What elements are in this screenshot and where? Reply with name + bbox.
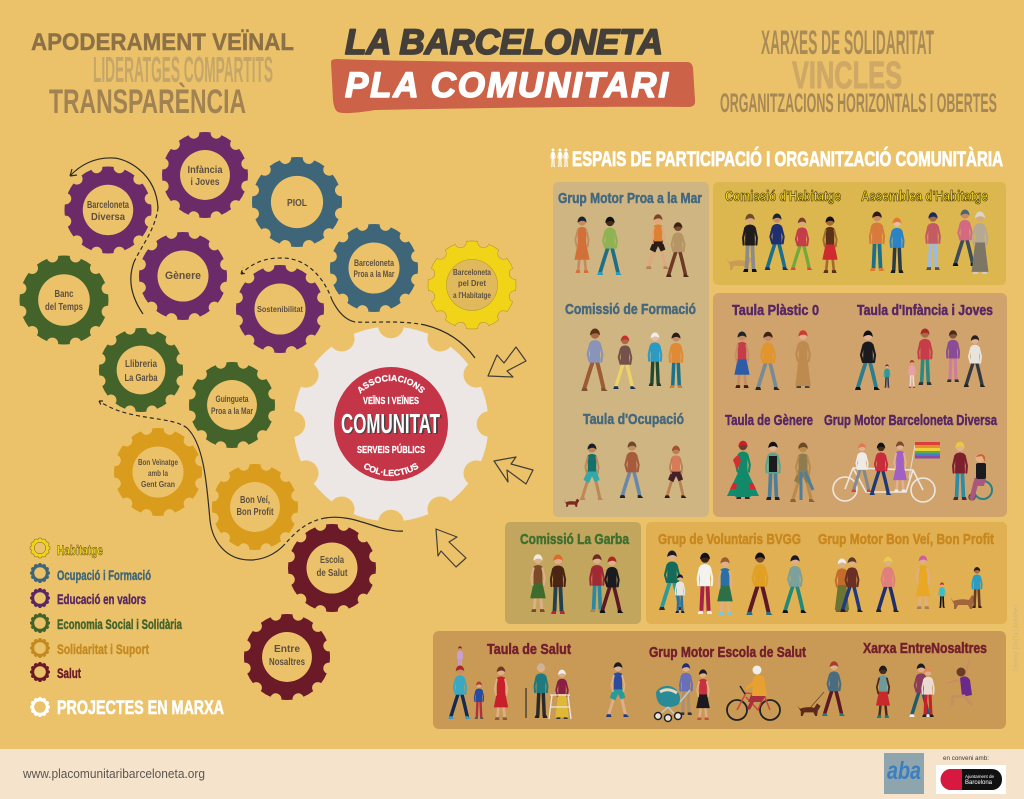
legend: Habitatge xyxy=(30,538,103,558)
heading: Taula d'Infància i Joves: Taula d'Infància i Joves xyxy=(857,302,993,319)
gear: Banc del Temps: Banc xyxy=(54,289,74,300)
panel: Habitatge xyxy=(713,182,1006,285)
heading: Comissió de Formació: Comissió de Formació xyxy=(565,301,696,318)
big gear: comunitat xyxy=(294,327,488,521)
gear: Barceloneta Diversa: Diversa xyxy=(91,212,125,223)
heading: Grup de Voluntaris BVGG: Grup de Voluntaris BVGG xyxy=(658,531,801,548)
people: Habitatge xyxy=(726,209,988,274)
gear: Entre Nosaltres: Nosaltres xyxy=(269,657,305,668)
text: LIDERATGES COMPARTITS xyxy=(93,49,273,90)
center labels: SERVEIS PÚBLICS xyxy=(357,443,425,456)
pram xyxy=(654,686,690,722)
panel: Educació en valors xyxy=(713,293,1007,517)
gear: Bon Veïnatge amb la Gent Gran xyxy=(114,428,202,516)
gear: Llibreria La Garba: La Garba xyxy=(124,373,158,384)
legend: Solidaritat i Suport: Solidaritat i Suport xyxy=(57,641,149,657)
gear: PIOL: PIOL xyxy=(287,198,307,209)
people: Taula de Salut xyxy=(448,646,571,720)
word cloud left xyxy=(31,29,294,121)
panel: Proa a la Mar, Formació, Ocupació xyxy=(553,182,709,517)
word cloud left: APODERAMENT VEÏNAL xyxy=(31,29,294,56)
people: Comissió de Formació xyxy=(581,329,683,391)
legend: Economia Social i Solidària xyxy=(30,613,182,633)
gear: Gènere xyxy=(139,232,227,320)
people: Grup Motor Proa a la Mar xyxy=(574,214,689,277)
legend: Salut xyxy=(30,662,81,682)
gear: Guingueta Proa a la Mar: Guingueta xyxy=(216,394,249,404)
gear: Bon Veïnatge amb la Gent Gran: amb la xyxy=(148,468,168,478)
people: Grup Motor Bon Veí, Bon Profit xyxy=(835,555,982,612)
center labels: COMUNITAT xyxy=(342,409,442,440)
flow lines xyxy=(70,158,475,560)
heading: Taula d'Ocupació: Taula d'Ocupació xyxy=(583,411,684,428)
legend xyxy=(30,538,224,719)
gear: Bon Veí, Bon Profit xyxy=(212,464,298,550)
gear: Infància i Joves: i Joves xyxy=(190,177,220,188)
logo: Ajuntament de Barcelona: Ajuntament de xyxy=(965,774,995,779)
gear: Barceloneta Diversa: Barceloneta xyxy=(87,200,129,211)
gear: Infància i Joves: Infància xyxy=(188,165,223,176)
gear: Llibreria La Garba: Llibreria xyxy=(125,359,157,370)
cyclist xyxy=(727,666,780,720)
center labels: COL·LECTIUS xyxy=(364,463,418,476)
word cloud right xyxy=(720,24,997,118)
legend: Educació en valors xyxy=(30,588,146,608)
legend: Salut: Salut xyxy=(57,665,81,681)
arrow 2 xyxy=(494,457,533,484)
people: Grup Motor Escola de Salut xyxy=(606,662,710,720)
panel: Comissió La Garba xyxy=(505,522,641,624)
heading: Taula Plàstic 0: Taula Plàstic 0 xyxy=(732,302,819,319)
gear: Barceloneta Proa a la Mar xyxy=(330,224,418,312)
people: Taula d'Ocupació xyxy=(564,441,687,507)
people: Taula Plàstic 0 xyxy=(734,330,811,390)
heading: Assemblea d'Habitatge: Assemblea d'Habitatge xyxy=(861,188,988,205)
agreement text: en conveni amb: xyxy=(943,755,989,762)
gear: Barceloneta pel Dret a l'Habitatge: Barceloneta xyxy=(453,267,491,277)
gear: Guingueta Proa a la Mar: Proa a la Mar xyxy=(211,406,253,416)
gear: Banc del Temps: del Temps xyxy=(45,302,83,313)
legend: Habitatge: Habitatge xyxy=(57,542,103,558)
gear: Infància i Joves xyxy=(162,132,248,218)
arrow 3 xyxy=(436,529,466,567)
gear: Bon Veí, Bon Profit: Bon Veí, xyxy=(240,495,270,506)
gear: Sostenibilitat xyxy=(236,265,324,353)
heading: Grup Motor Escola de Salut: Grup Motor Escola de Salut xyxy=(649,644,806,661)
legend: Educació en valors: Educació en valors xyxy=(57,591,146,607)
people: wheelchair and companion xyxy=(953,442,992,500)
vertical credit: Disseny: [Dis]Tu | BaBaPiez xyxy=(1013,605,1020,671)
word cloud right: VINCLES xyxy=(792,55,902,97)
heading: Taula de Gènere: Taula de Gènere xyxy=(725,412,813,429)
footer band xyxy=(0,749,1024,799)
panel: Salut xyxy=(433,631,1006,729)
pride flag xyxy=(909,442,940,478)
heading: Comissió d'Habitatge: Comissió d'Habitatge xyxy=(725,188,841,205)
gear: Escola de Salut xyxy=(288,524,376,612)
gear: Barceloneta pel Dret a l'Habitatge: pel Dret xyxy=(458,278,486,288)
heading: Taula de Salut: Taula de Salut xyxy=(487,641,571,658)
people: Grup de Voluntaris BVGG xyxy=(659,550,807,615)
heading: Comissió La Garba: Comissió La Garba xyxy=(520,531,630,548)
word cloud left: TRANSPARÈNCIA xyxy=(49,83,246,121)
person jumping xyxy=(948,661,972,705)
logo: Ajuntament de Barcelona xyxy=(936,765,1006,794)
legend: Ocupació i Formació xyxy=(30,563,151,583)
legend: Economia Social i Solidària: Economia Social i Solidària xyxy=(57,616,182,632)
legend: Projectes en marxa: PROJECTES EN MARXA xyxy=(57,698,224,719)
gear: Escola de Salut: de Salut xyxy=(316,568,348,579)
title banner: Pla Comunitari xyxy=(331,59,695,113)
gear: Bon Veïnatge amb la Gent Gran: Gent Gran xyxy=(141,479,175,489)
gear: PIOL xyxy=(252,157,342,247)
gear: Banc del Temps xyxy=(20,256,108,344)
gear: Llibreria La Garba xyxy=(99,328,183,412)
center labels: COMUNITAT xyxy=(341,408,440,439)
gear: Entre Nosaltres: Entre xyxy=(274,644,300,655)
dog walker xyxy=(797,661,845,716)
gear: Barceloneta Proa a la Mar: Barceloneta xyxy=(354,258,395,268)
gear: Entre Nosaltres xyxy=(244,614,330,700)
tandem bicycle xyxy=(833,441,935,502)
gear: Barceloneta pel Dret a l'Habitatge xyxy=(428,241,516,329)
gear: Gènere: Gènere xyxy=(165,270,201,282)
arrow 1 xyxy=(488,347,526,377)
gear: Escola de Salut: Escola xyxy=(320,555,344,566)
panel: Solidaritat i Suport xyxy=(646,522,1007,624)
center labels xyxy=(341,374,442,476)
people: Taula de Gènere xyxy=(727,441,815,502)
gear: Bon Veí, Bon Profit: Bon Profit xyxy=(236,507,274,518)
legend: Solidaritat i Suport xyxy=(30,638,149,658)
people: Taula d'Infància i Joves xyxy=(855,328,985,390)
gear: Guingueta Proa a la Mar xyxy=(189,362,275,448)
people: La Garba xyxy=(530,554,623,614)
gear: Barceloneta Diversa xyxy=(65,167,151,253)
footer url: www.placomunitaribarceloneta.org xyxy=(22,767,205,781)
gear: Barceloneta pel Dret a l'Habitatge: a l'Habitatge xyxy=(453,290,491,300)
gear: Bon Veïnatge amb la Gent Gran: Bon Veïnatge xyxy=(138,457,178,467)
center labels: VEÏNS I VEÏNES xyxy=(363,394,419,407)
people: Xarxa EntreNosaltres xyxy=(876,663,934,718)
title banner: Pla Comunitari: PLA COMUNITARI xyxy=(345,66,669,105)
gear: Sostenibilitat: Sostenibilitat xyxy=(257,304,303,314)
center labels: ASSOCIACIONS xyxy=(358,374,425,394)
logo: aba: aba xyxy=(887,757,921,785)
heading: Xarxa EntreNosaltres: Xarxa EntreNosaltres xyxy=(863,640,987,657)
logo: Ajuntament de Barcelona: Barcelona xyxy=(965,780,993,786)
logo: aba xyxy=(884,753,924,794)
title: La Barceloneta: LA BARCELONETA xyxy=(345,23,663,62)
gear: Barceloneta Proa a la Mar: Proa a la Mar xyxy=(354,269,395,279)
heading: Grup Motor Proa a la Mar: Grup Motor Proa a la Mar xyxy=(558,190,702,207)
legend: Projectes en marxa xyxy=(30,697,224,719)
legend: Ocupació i Formació: Ocupació i Formació xyxy=(57,567,151,583)
